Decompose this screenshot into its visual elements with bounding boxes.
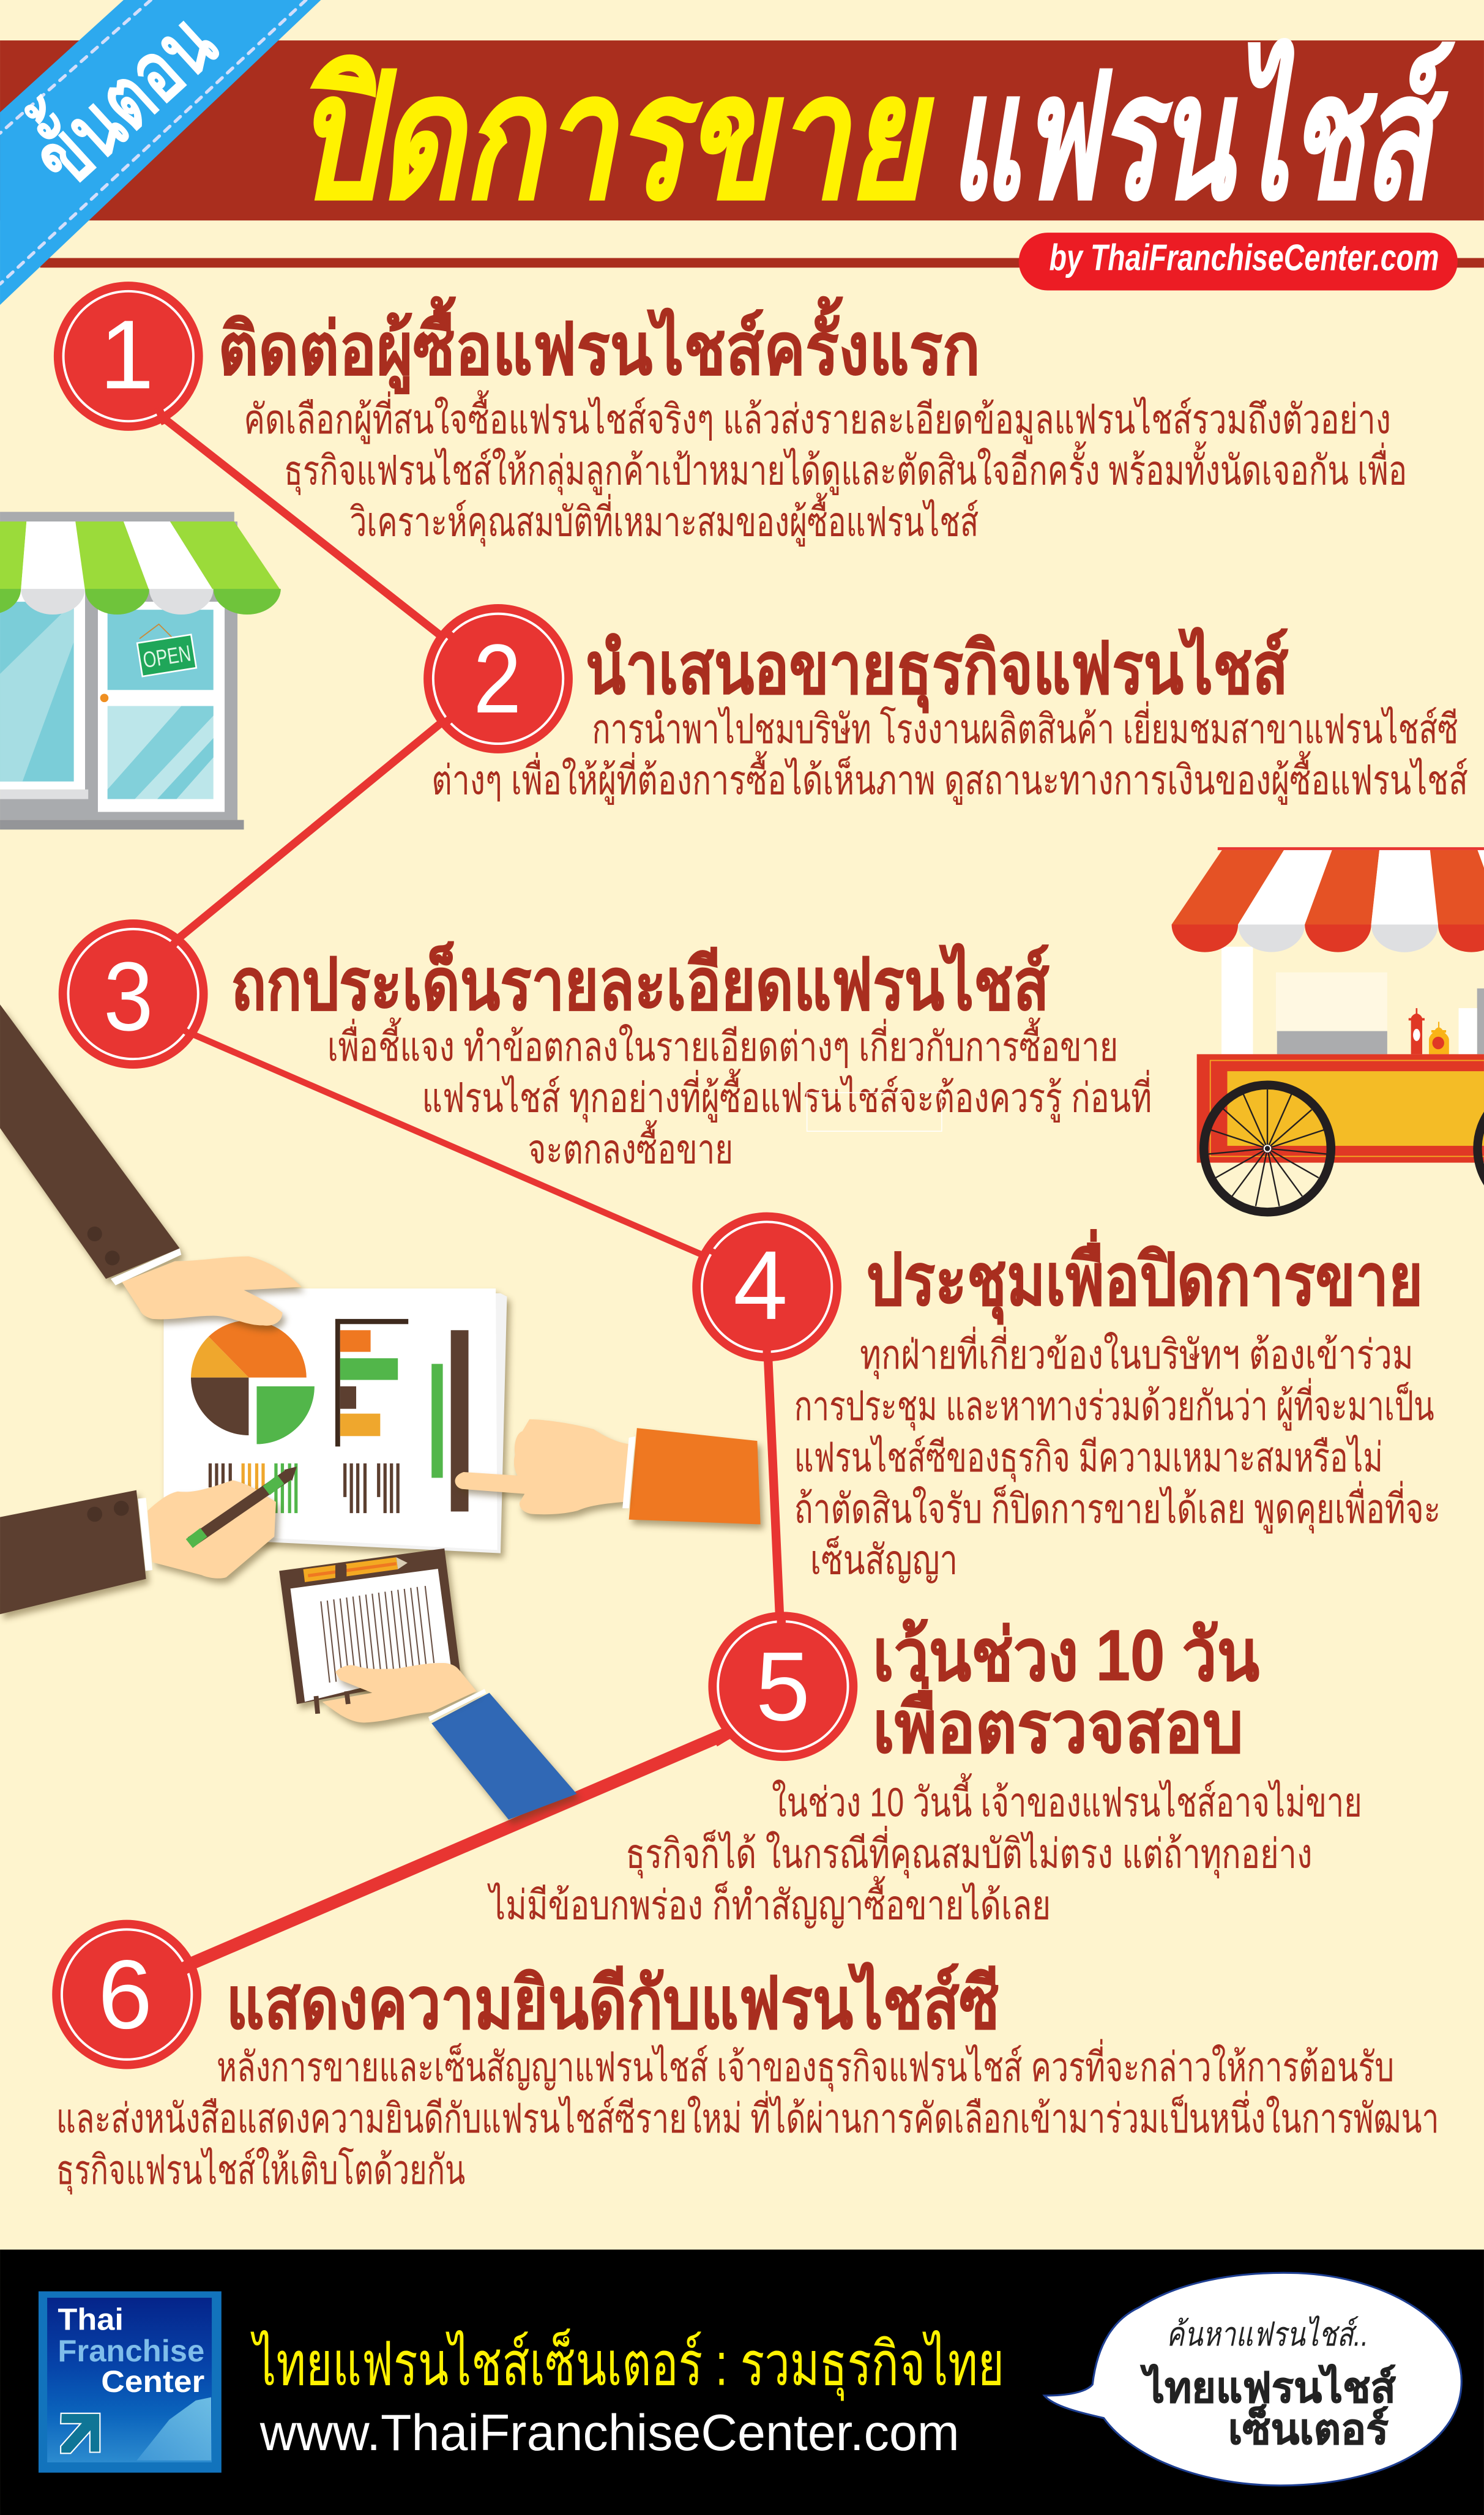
step 3 marker	[59, 919, 208, 1069]
step 4 body: เซ็นสัญญา	[810, 1536, 958, 1583]
connector lines	[160, 416, 781, 1977]
step 2 body	[431, 701, 1468, 805]
speech bubble: ค้นหาแฟรนไชส์..	[1166, 2315, 1368, 2353]
step 5 body	[487, 1773, 1362, 1928]
step 3 body: จะตกลงซื้อขาย	[528, 1120, 733, 1173]
report paper	[163, 1288, 507, 1553]
step 1 marker: 1	[100, 299, 154, 409]
step 4 body	[794, 1326, 1441, 1583]
step 3 body: แฟรนไชส์ ทุกอย่างที่ผู้ซื้อแฟรนไชส์จะต้องควรรู้ ก่อนที่	[422, 1069, 1152, 1123]
logo: Franchise	[58, 2334, 204, 2368]
logo	[39, 2292, 222, 2473]
step 3 body	[327, 1017, 1152, 1173]
step 2 marker	[423, 604, 573, 753]
clipboard	[279, 1549, 460, 1704]
step 6 heading: แสดงความยินดีกับแฟรนไชส์ซี	[226, 1962, 999, 2044]
footer band	[0, 2249, 1484, 2515]
byline pill	[1019, 233, 1458, 290]
title: ปิดการขาย	[295, 40, 935, 234]
step 1 heading: ติดต่อผู้ซื้อแฟรนไชส์ครั้งแรก	[218, 296, 980, 394]
corner ribbon	[0, 0, 321, 305]
cart illustration	[1172, 847, 1484, 1212]
step 2 marker: 2	[473, 624, 521, 733]
step 4 marker: 4	[733, 1230, 788, 1340]
step 1 body	[244, 390, 1407, 547]
logo: Center	[101, 2364, 204, 2399]
header rule	[40, 258, 1484, 267]
step 3 body: เพื่อชี้แจง ทำข้อตกลงในรายเอียดต่างๆ เกี่ยวกับการซื้อขาย	[327, 1017, 1118, 1070]
orange sleeve and pointing hand	[455, 1419, 761, 1524]
speech bubble: ไทยแฟรนไชส์	[1140, 2363, 1396, 2411]
pie chart	[191, 1320, 315, 1444]
step 6 body	[56, 2039, 1439, 2195]
meeting illustration	[0, 1004, 761, 1820]
header band	[0, 40, 1484, 220]
step 5 marker	[708, 1612, 857, 1761]
shop illustration	[0, 512, 281, 829]
left sleeve and hand with pen	[0, 1467, 297, 1614]
footer url: www.ThaiFranchiseCenter.com	[259, 2404, 960, 2461]
bottom hand and blue sleeve	[316, 1663, 576, 1820]
step 5 body: ธุรกิจก็ได้ ในกรณีที่คุณสมบัติไม่ตรง แต่ถ้าทุกอย่าง	[625, 1825, 1312, 1878]
step 1 marker	[54, 282, 203, 431]
step 3 heading: ถกประเด็นรายละเอียดแฟรนไชส์	[231, 941, 1050, 1025]
step 5 marker: 5	[756, 1631, 810, 1741]
top hand	[122, 1257, 302, 1326]
footer tagline: ไทยแฟรนไชส์เซ็นเตอร์ : รวมธุรกิจไทย	[250, 2328, 1004, 2401]
speech bubble: เซ็นเตอร์	[1228, 2405, 1389, 2453]
step 5 heading: เว้นช่วง 10 วัน	[873, 1615, 1259, 1695]
step 5 heading	[873, 1615, 1259, 1768]
barcode bars	[210, 1463, 398, 1513]
top-left sleeve	[0, 1004, 181, 1285]
step 6 marker: 6	[98, 1940, 152, 2049]
speech bubble	[1045, 2273, 1461, 2486]
step 2 heading: นำเสนอขายธุรกิจแฟรนไชส์	[586, 627, 1288, 714]
step 5 heading: เพื่อตรวจสอบ	[873, 1677, 1244, 1768]
step 6 body: ธุรกิจแฟรนไชส์ให้เติบโตด้วยกัน	[56, 2147, 465, 2195]
step 6 marker	[52, 1920, 201, 2069]
step 3 marker: 3	[103, 941, 153, 1051]
step 5 body: ไม่มีข้อบกพร่อง ก็ทำสัญญาซื้อขายได้เลย	[487, 1875, 1051, 1928]
logo: Thai	[58, 2302, 124, 2336]
bar chart	[335, 1319, 469, 1511]
step 1 body: วิเคราะห์คุณสมบัติที่เหมาะสมของผู้ซื้อแฟรนไชส์	[350, 493, 979, 547]
step 4 marker	[692, 1213, 841, 1361]
shop illustration: OPEN	[141, 640, 193, 673]
